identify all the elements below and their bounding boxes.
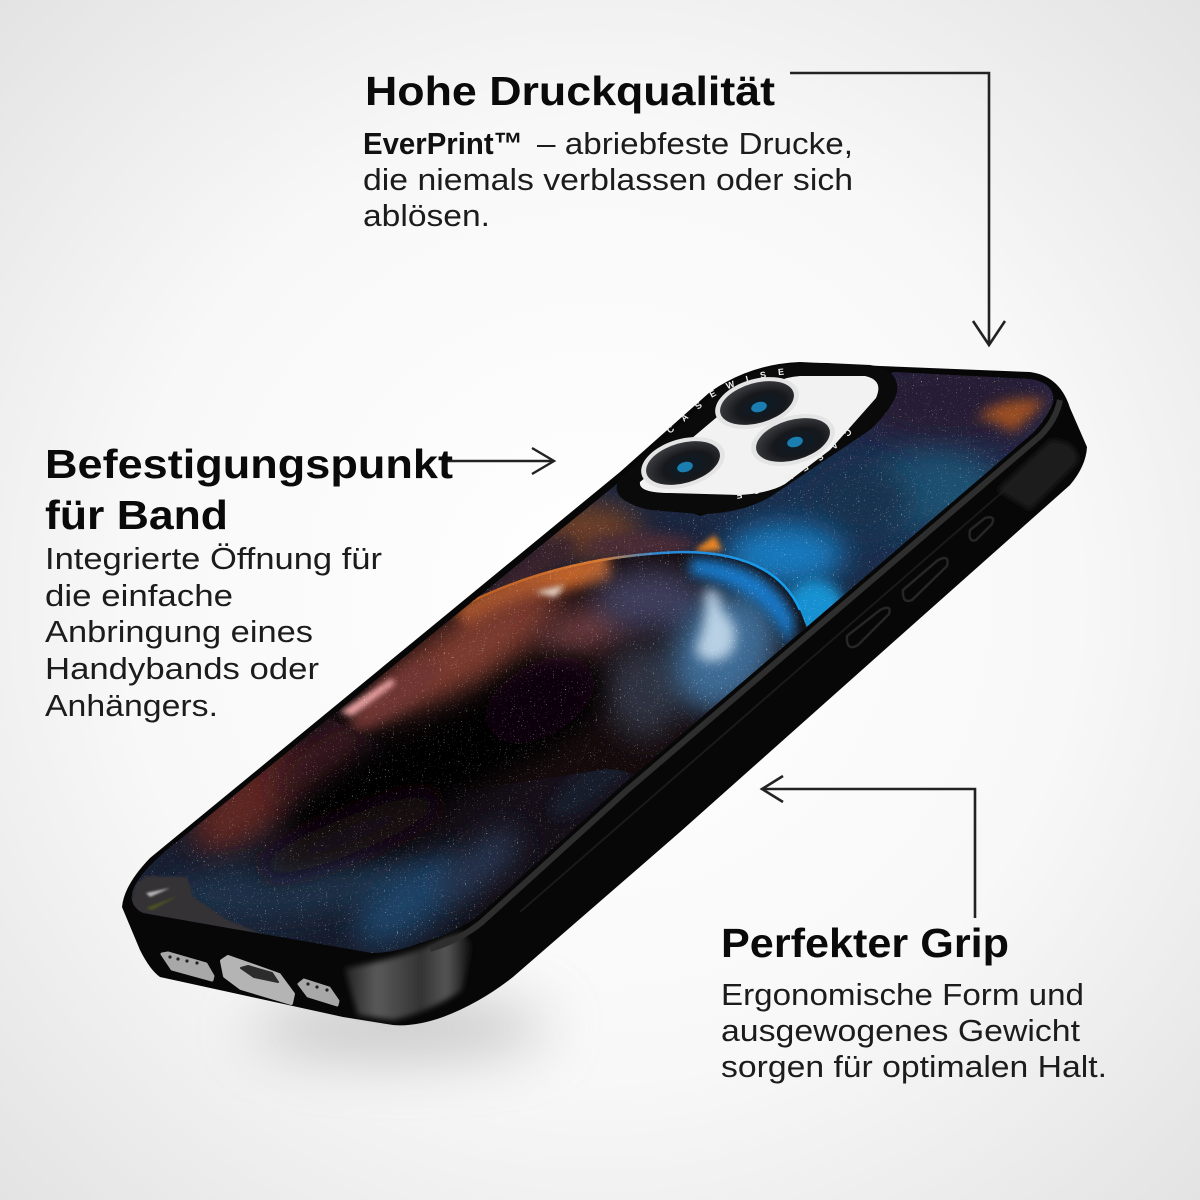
rocks: [132, 875, 263, 934]
speaker right: [299, 980, 338, 1005]
bump lettering top: [670, 372, 830, 434]
side rail sheen: [430, 400, 1060, 949]
text block: print quality: [363, 68, 853, 233]
text block: strap attachment: [45, 441, 453, 723]
body: grip: sorgen für optimalen Halt.: [721, 1049, 1107, 1084]
blue limb: [690, 558, 795, 650]
white fleck: [535, 585, 565, 597]
heading: print quality: Hohe Druckqualität: [365, 68, 775, 114]
red plain: [365, 576, 574, 726]
highlight streak: [340, 678, 395, 716]
body: print quality: [363, 126, 853, 233]
lower blue water: [188, 854, 404, 924]
body: strap attachment: Anhängers.: [45, 688, 218, 723]
galaxy artwork: [120, 355, 1070, 962]
phone case: [122, 362, 1087, 1026]
reddish ridge: [530, 592, 640, 668]
speaker left: [162, 953, 213, 980]
camera bump: CASEWISE: [736, 430, 852, 499]
arrow: print quality: [790, 73, 1005, 345]
body: grip: Ergonomische Form und: [721, 977, 1084, 1012]
bump lettering bottom: [672, 428, 848, 500]
body: print quality: die niemals verblassen oder sich: [363, 162, 853, 197]
nebula: bright blue: [725, 523, 845, 587]
dusk purple: [595, 568, 705, 632]
planet rim: [458, 552, 800, 610]
planet: [330, 553, 806, 786]
side buttons: [847, 517, 993, 647]
bump glass: [640, 376, 878, 495]
charging port: [222, 957, 293, 1003]
arrow: strap attachment: [447, 448, 554, 474]
black shadow over planet base: [275, 681, 550, 836]
arrow: grip: [762, 776, 975, 918]
flare orange: [695, 535, 722, 552]
heading: grip: Perfekter Grip: [721, 920, 1009, 966]
upper side patch: [997, 440, 1078, 510]
nebula: dark purple top: [874, 372, 1028, 443]
body: strap attachment: die einfache: [45, 578, 233, 613]
bottom ports: [162, 953, 338, 1005]
star field: [120, 360, 1070, 960]
lower left red: [180, 743, 301, 864]
lens right: [745, 405, 841, 475]
orange slope: [462, 566, 610, 622]
nebula: orange top right: [977, 399, 1045, 432]
planet blue face: [654, 580, 797, 726]
nebula: navy: [854, 468, 917, 524]
heading: strap attachment: Befestigungspunkt: [45, 441, 453, 487]
bump frame: [617, 363, 897, 514]
camera bump: [616, 362, 898, 514]
camera bump: CASEWISE: [668, 368, 784, 433]
case body: [122, 362, 1087, 1025]
body: strap attachment: [45, 541, 382, 723]
body: grip: [721, 977, 1107, 1084]
heading: strap attachment: für Band: [45, 492, 228, 538]
body: print quality: ablösen.: [363, 198, 490, 233]
body: grip: ausgewogenes Gewicht: [721, 1013, 1080, 1048]
nebula: teal: [865, 450, 1005, 530]
body: strap attachment: Integrierte Öffnung für: [45, 541, 382, 576]
body: strap attachment: Handybands oder: [45, 651, 319, 686]
glossy corner highlight: [345, 932, 472, 1020]
lens left: [635, 428, 731, 498]
nebula: orange left of camera: [540, 504, 640, 556]
body: print quality: EverPrint™: [363, 126, 523, 161]
lens top: [709, 368, 805, 438]
phone drop shadow: [250, 1000, 550, 1056]
side rail groove: [520, 455, 1045, 912]
white clouds: [695, 588, 736, 661]
body: print quality: – abriebfeste Drucke,: [537, 126, 853, 161]
text block: grip: [721, 920, 1107, 1084]
heading: strap attachment: [45, 441, 453, 538]
body: strap attachment: Anbringung eines: [45, 614, 313, 649]
